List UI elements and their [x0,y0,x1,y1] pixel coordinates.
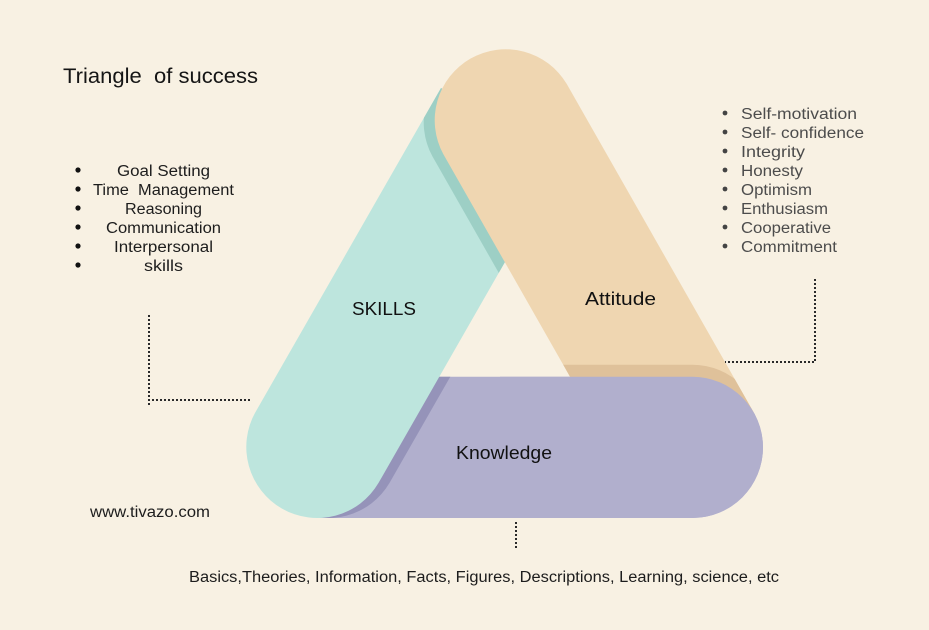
list: attitude: Integrity [741,144,805,161]
list: attitude: Cooperative [741,220,831,237]
list: skills [75,163,235,275]
website: www.tivazo.com [89,504,210,521]
label: attitude: Attitude [585,288,656,309]
list: attitude: Honesty [741,163,803,180]
knowledge band overlapping attitude [500,364,763,518]
list: attitude [723,106,864,256]
text: knowledge list: Basics,Theories, Information, Facts, Figures, Descriptions, Learning, science, etc [189,569,779,586]
connector: attitude list to band [725,279,815,362]
list: skills: skills [144,258,183,275]
list: skills: Interpersonal [114,239,213,256]
list: skills: Reasoning [125,201,202,218]
band: skills [246,88,505,518]
list: attitude: Self-motivation [741,106,857,123]
list: attitude: Enthusiasm [741,201,828,218]
infographic: triangle of success [64,49,864,586]
band: attitude [435,49,754,483]
title: Triangle of success [63,64,258,88]
list: attitude: Commitment [741,239,838,256]
list: attitude: Self- confidence [741,125,864,142]
list: skills: Time Management [93,182,235,199]
list: skills: Communication [106,220,221,237]
connector: knowledge text to band [515,522,517,549]
label: skills: SKILLS [352,298,416,319]
label: knowledge: Knowledge [456,442,552,463]
list: skills: Goal Setting [117,163,210,180]
connector: skills list to band [148,315,252,405]
list: attitude: Optimism [741,182,812,199]
band: knowledge [320,376,763,518]
